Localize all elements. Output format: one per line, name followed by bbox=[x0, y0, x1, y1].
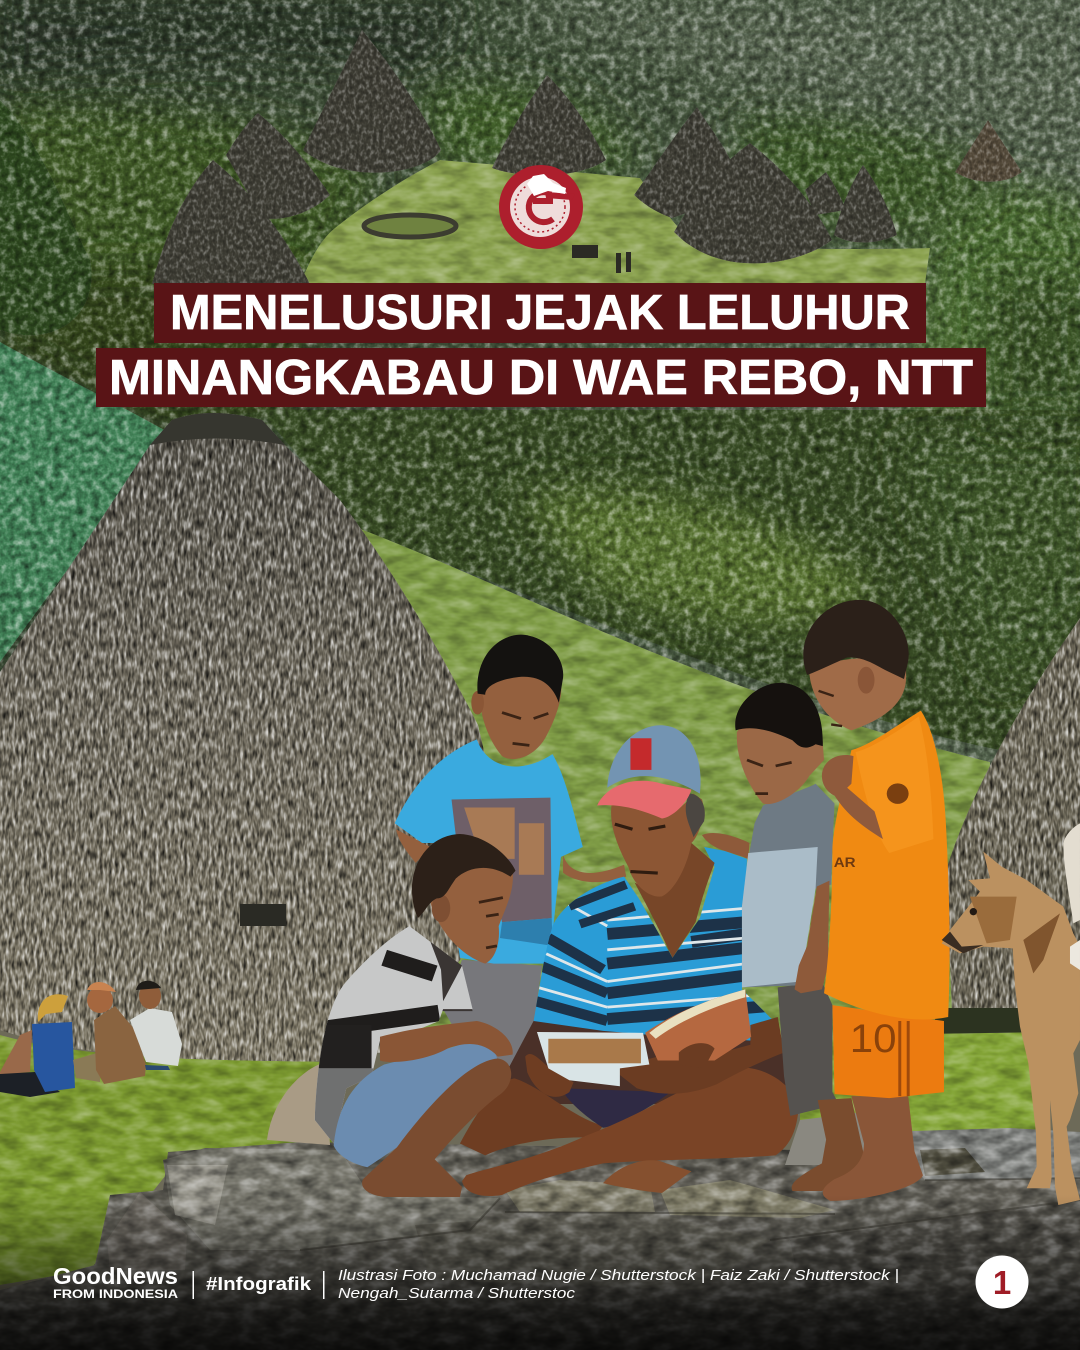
shorts bbox=[832, 1005, 944, 1098]
left page bbox=[537, 1032, 649, 1086]
hashtag: #Infografik bbox=[206, 1274, 312, 1294]
head bbox=[737, 714, 824, 804]
large thatched hut bbox=[0, 413, 500, 1062]
boy crouching in front bbox=[308, 834, 516, 1197]
red G bbox=[529, 192, 553, 222]
right arm bbox=[563, 855, 626, 882]
stone crevices bbox=[300, 1178, 1080, 1250]
jersey bbox=[824, 711, 950, 1020]
hut top cap bbox=[150, 413, 285, 445]
leg and foot bbox=[362, 1059, 511, 1197]
page number badge bbox=[976, 1256, 1028, 1308]
shirt dark stripes bbox=[325, 958, 439, 1029]
tree clump left bbox=[0, 100, 92, 335]
separator bbox=[192, 1271, 194, 1299]
left thigh bbox=[460, 1078, 603, 1155]
visitors on lawn bbox=[572, 245, 631, 273]
pale stone behind standing boys bbox=[785, 1110, 880, 1165]
dark shorts bbox=[561, 1088, 670, 1128]
title line 1: MENELUSURI JEJAK LELUHUR bbox=[170, 286, 910, 340]
villager white shirt bbox=[130, 981, 182, 1070]
seated villagers on the left bbox=[0, 981, 182, 1097]
left hand bbox=[525, 1054, 574, 1097]
neck bbox=[635, 843, 715, 958]
emblem disc bbox=[510, 177, 570, 237]
bush under right hut bbox=[935, 1008, 1035, 1036]
cap brim bbox=[597, 781, 691, 819]
jeans bbox=[334, 1037, 499, 1167]
distant forested hills bbox=[0, 0, 1080, 780]
grass right bbox=[800, 1032, 1050, 1140]
right thatched hut bbox=[946, 618, 1080, 1040]
boy in blue shirt bbox=[395, 635, 626, 1068]
dog body bbox=[942, 852, 1080, 1205]
thumb over book bbox=[679, 1043, 715, 1068]
family reading group bbox=[308, 600, 950, 1201]
boy in orange jersey bbox=[803, 600, 950, 1201]
ear bbox=[858, 667, 875, 694]
face features bbox=[479, 898, 503, 948]
villager brown shirt bbox=[73, 982, 146, 1084]
hair bbox=[477, 635, 563, 703]
hair bbox=[803, 600, 909, 679]
brand: GoodNews from Indonesia: GoodNews bbox=[53, 1263, 178, 1289]
open book bbox=[537, 989, 751, 1086]
hut window bbox=[240, 904, 286, 926]
white tail bbox=[1063, 823, 1080, 923]
shirt graphic bbox=[452, 798, 552, 922]
eye bbox=[970, 908, 977, 915]
face features bbox=[747, 760, 792, 794]
other foot bbox=[603, 1160, 691, 1193]
head bbox=[426, 861, 513, 964]
arm bbox=[380, 1021, 513, 1062]
light green mid hill bbox=[358, 528, 1000, 1080]
shorts stripes bbox=[900, 1021, 908, 1096]
stone terrace bbox=[0, 1128, 1080, 1350]
muzzle bbox=[942, 932, 983, 953]
shirt bbox=[315, 926, 473, 1144]
ear bbox=[432, 894, 450, 922]
grass foreground bbox=[0, 1035, 340, 1285]
legs bbox=[823, 1096, 923, 1201]
shorts number: 10 bbox=[850, 1016, 897, 1061]
crossed leg bbox=[462, 1067, 799, 1196]
village lawn bbox=[300, 160, 930, 284]
stone slabs bbox=[163, 1148, 500, 1250]
white weathered patch bbox=[167, 1165, 228, 1225]
bottom dark gradient bbox=[0, 1195, 1080, 1350]
cap crown bbox=[607, 725, 701, 794]
graphic faces bbox=[464, 807, 544, 875]
photo credits: Ilustrasi Foto : Muchamad Nugie / Shutterstock | Faiz Zaki / Shutterstock | bbox=[338, 1267, 899, 1284]
left arm bbox=[396, 829, 430, 863]
villager blue vest bbox=[0, 994, 75, 1097]
small huts in the village bbox=[152, 30, 1022, 284]
ear bbox=[471, 691, 484, 715]
collar shadow bbox=[430, 942, 473, 1011]
shorts bbox=[443, 960, 542, 1068]
shirt bbox=[395, 739, 583, 964]
emblem pattern bbox=[515, 182, 565, 232]
hair bbox=[735, 683, 823, 748]
facial features bbox=[615, 824, 665, 873]
side hair bbox=[686, 794, 705, 837]
boy in grey shirt bbox=[702, 683, 866, 1191]
torso base bbox=[489, 1017, 797, 1104]
brows, eyes and mouth bbox=[502, 713, 548, 745]
shirt bbox=[742, 784, 835, 987]
page number badge: 1 bbox=[993, 1264, 1011, 1301]
brand: GoodNews from Indonesia: FROM INDONESIA bbox=[53, 1287, 178, 1301]
man sitting with book bbox=[460, 725, 799, 1196]
photo credits bbox=[338, 1267, 899, 1302]
arm bbox=[822, 755, 883, 839]
darker back patch bbox=[1023, 913, 1060, 973]
face shading bbox=[970, 897, 1017, 943]
cap badge bbox=[630, 738, 651, 770]
tan boulder bbox=[267, 1062, 330, 1145]
title line 2: MINANGKABAU DI WAE REBO, NTT bbox=[109, 351, 973, 405]
page pictures bbox=[548, 1039, 641, 1063]
arm bbox=[795, 881, 829, 993]
bright green hill, left bbox=[0, 342, 168, 662]
striped shirt bbox=[534, 847, 772, 1040]
shorts bbox=[778, 981, 839, 1116]
hair bbox=[412, 834, 516, 918]
right arm bbox=[611, 1017, 784, 1094]
separator bbox=[323, 1271, 324, 1299]
lower dark band bbox=[317, 1025, 372, 1068]
logo: Garuda G emblem bbox=[499, 165, 583, 249]
photo credits: Nengah_Sutarma / Shutterstoc bbox=[338, 1285, 576, 1302]
head bbox=[611, 794, 703, 897]
jersey sleeve bbox=[856, 717, 933, 853]
cover edge bbox=[649, 989, 745, 1039]
stone circle on lawn bbox=[364, 215, 456, 237]
brand: GoodNews from Indonesia bbox=[53, 1263, 178, 1301]
sleeve badge bbox=[887, 783, 909, 804]
disc gap bbox=[545, 192, 575, 200]
head bbox=[809, 658, 906, 730]
white chest patch bbox=[1070, 940, 1080, 970]
legs bbox=[792, 1098, 866, 1191]
graphic lower band bbox=[500, 918, 553, 946]
shirt lower paint bbox=[742, 847, 818, 987]
shirt grey hem bbox=[314, 1068, 374, 1143]
jersey print: AR bbox=[834, 855, 856, 871]
face features bbox=[819, 691, 842, 726]
right cover bbox=[645, 989, 751, 1061]
hand on shoulder bbox=[702, 833, 750, 859]
head bbox=[480, 664, 561, 759]
title bbox=[96, 283, 986, 407]
footer bbox=[53, 1256, 1028, 1308]
eagle head bbox=[527, 174, 566, 196]
dog bbox=[942, 823, 1080, 1205]
